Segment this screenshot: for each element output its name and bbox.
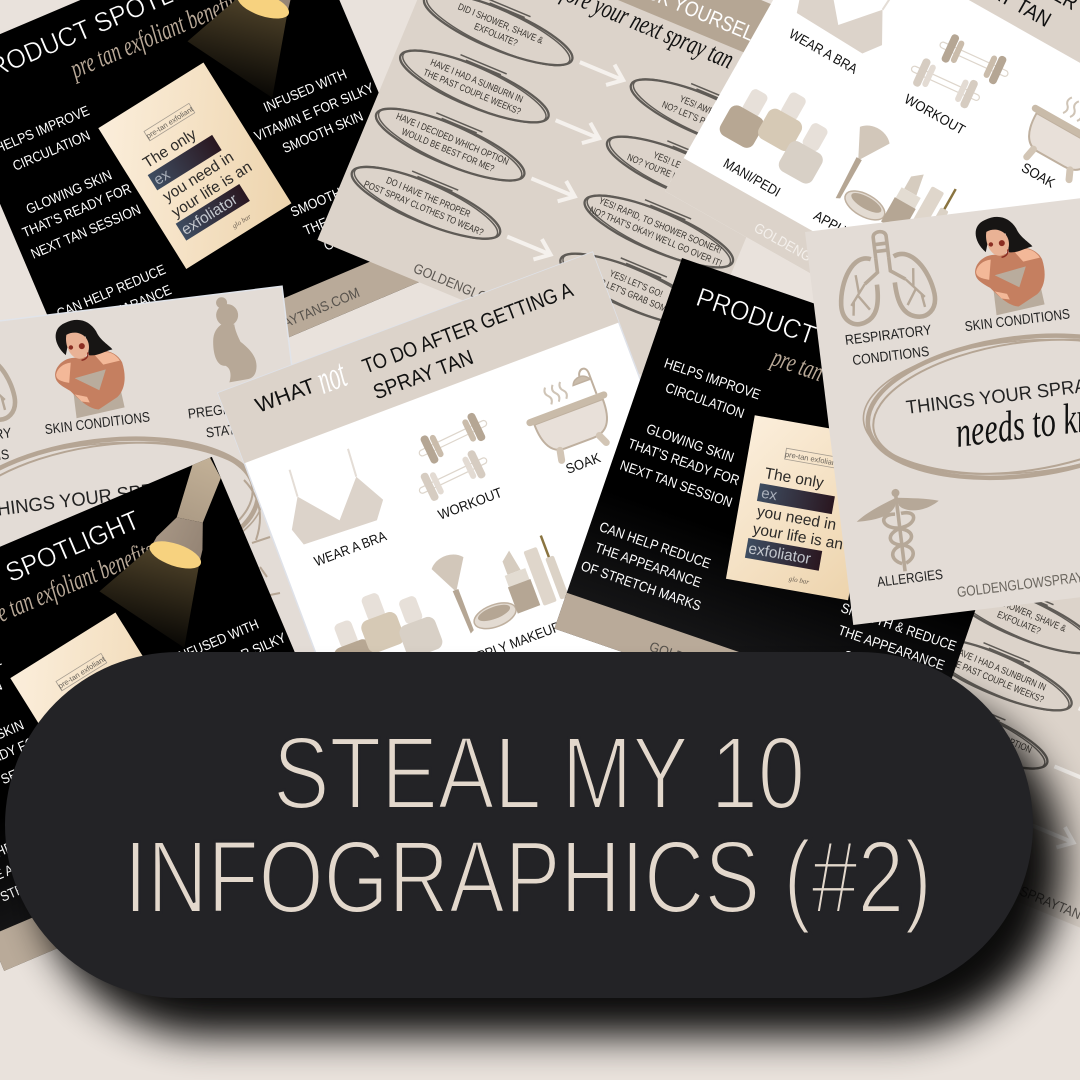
question ovals: [344, 0, 581, 253]
panel: questions to ask yourself card, top centre: [317, 0, 852, 400]
subheading script: pre tan exfoliant benefits: [766, 342, 951, 431]
question text: HAVE I DECIDED WHICH OPTION: [395, 110, 511, 167]
icon: pregnant silhouette: [207, 294, 258, 384]
product bag: [98, 62, 291, 269]
benefits left column: OF STRETCH MARKS: [579, 558, 703, 614]
question text: HAVE I HAD A SUNBURN IN: [952, 644, 1048, 693]
benefits left column: THAT'S READY FOR: [20, 180, 134, 241]
panel: product spotlight card, top left: [0, 0, 453, 421]
scribble tails beside lower-left card: [243, 480, 280, 595]
icon: bra: [272, 443, 389, 549]
label: WORKOUT: [436, 485, 504, 523]
arrows: [503, 52, 627, 265]
product bag: pre-tan exfoliant: [56, 654, 108, 691]
icon: bra: [790, 0, 912, 60]
website text: GOLDENGLOWSPRAYTANS.COM: [411, 260, 598, 350]
answer text: [564, 77, 776, 327]
question text: HAVE I HAD A SUNBURN IN: [429, 56, 525, 105]
question text: DO I HAVE THE PROPER: [385, 175, 472, 219]
question ovals: [867, 564, 1080, 841]
product bag: you need in: [756, 503, 837, 534]
product bag: ex: [151, 166, 174, 189]
benefits left column: NEXT TAN SESSION: [28, 201, 143, 262]
benefits right column: VITAMIN E FOR SILKY: [164, 629, 288, 694]
icon: lungs: [833, 226, 937, 326]
answer text: NO? LET'S GRAB SOME!: [588, 272, 675, 317]
icon: makeup: [429, 520, 570, 641]
heading band: [821, 0, 1080, 113]
answer text: YES! LET'S GO!: [608, 267, 664, 299]
benefits right column: OF CELLULITE: [321, 205, 407, 254]
label: [0, 425, 15, 472]
label: CONDITIONS: [851, 343, 930, 368]
benefits left column: CAN HELP REDUCE: [597, 519, 713, 572]
label: PREGNANCY: [187, 396, 266, 422]
label: APPLY MAKEUP: [811, 207, 903, 269]
icon: nail polish: [716, 69, 846, 186]
icon: dumbbells: [903, 18, 1016, 124]
heading: PRODUCT SPOTLIGHT: [693, 282, 960, 399]
answer text: YES! LET'S BOOK!: [652, 149, 717, 185]
benefits left column: OF STRETCH MARKS: [67, 299, 189, 363]
question text: DID I SHOWER, SHAVE &: [456, 1, 545, 46]
icon: bath: [1009, 79, 1080, 189]
footer band: [77, 233, 453, 421]
label: SKIN CONDITIONS: [44, 408, 151, 437]
question text: EXFOLIATE?: [996, 609, 1042, 636]
product bag: The only: [140, 126, 200, 172]
benefits left column: GLOWING SKIN: [24, 167, 114, 217]
title pill: [5, 652, 1033, 998]
product bag: you need in: [160, 149, 237, 205]
panel: things your spray tan artist needs to know, right: [805, 183, 1080, 625]
label: WEAR A BRA: [312, 528, 389, 569]
benefits right column: INFUSED WITH: [173, 616, 261, 665]
question text: [362, 0, 562, 238]
icon: makeup: [822, 120, 967, 252]
question text: HAVE I DECIDED WHICH OPTION: [918, 698, 1034, 755]
label: MANI/PEDI: [721, 155, 783, 200]
panel: product spotlight card, lower left: [0, 457, 365, 971]
benefits right column: VITAMIN E FOR SILKY: [252, 79, 376, 144]
website text: GOLDENGLOWSPRAYTANS.COM: [172, 284, 362, 377]
answer text: NO? YOU'RE IN GOOD HANDS!: [626, 151, 734, 205]
icon: dumbbells: [399, 408, 507, 506]
panel: product spotlight card, centre: [554, 258, 1053, 756]
benefits left column: CIRCULATION: [10, 127, 92, 174]
answer text: YES! RAPID, TO SHOWER SOONER!: [597, 195, 723, 256]
answer text: NO? LET'S PICK A DATE!: [660, 99, 747, 143]
panel: things your spray tan artist needs to know, left: [0, 286, 330, 728]
benefits right column: [155, 608, 297, 714]
product bag: glo bar: [788, 575, 810, 586]
arrows: [1026, 698, 1080, 853]
benefits left column: CAN HELP REDUCE: [54, 261, 168, 322]
benefits right column: [825, 600, 959, 696]
product bag: The only: [763, 465, 825, 492]
benefits right column: SMOOTH SKIN: [192, 658, 277, 706]
product bag: [726, 415, 877, 600]
panel: questions card, lower right: [840, 466, 1080, 980]
label: [844, 322, 935, 369]
icon: lungs: [0, 329, 17, 429]
question text: WOULD BE BEST FOR ME?: [400, 126, 496, 174]
heading continued: TO DO AFTER GETTING A: [359, 278, 576, 378]
scribble oval: [853, 316, 1080, 498]
benefits right column: SMOOTH SKIN: [280, 108, 365, 156]
benefits left column: CIRCULATION: [663, 379, 746, 421]
question text: WOULD BE BEST FOR ME?: [923, 714, 1019, 762]
icon: woman: [49, 315, 129, 420]
benefits right column: [243, 58, 426, 262]
product bag: exfoliator: [747, 540, 812, 568]
question text: DID I SHOWER, SHAVE &: [979, 589, 1068, 634]
label: STATUS: [205, 419, 253, 441]
benefits left column: [0, 647, 101, 913]
footer band: [0, 783, 365, 971]
product bag: ex: [760, 485, 779, 504]
footer band: [554, 593, 937, 756]
scribble oval: [0, 419, 273, 601]
answer text: YES! AWESOME!: [678, 93, 739, 127]
label: WEAR A BRA: [786, 26, 861, 77]
question text: [913, 583, 1080, 766]
product bag: pre-tan exfoliant: [144, 104, 196, 141]
label: [187, 396, 269, 443]
answer ovals: [551, 62, 790, 340]
benefits right column: THE APPEARANCE: [301, 180, 410, 238]
question text: THE PAST COUPLE WEEKS?: [945, 655, 1046, 705]
label: APPLY MAKEUP: [467, 618, 563, 667]
label: RESPIRATORY: [844, 322, 932, 348]
product bag: glo bar: [231, 212, 253, 230]
benefits left column: NEXT TAN SESSION: [618, 457, 734, 510]
heading second line: SPRAY TAN: [370, 346, 477, 404]
question text: THE PAST COUPLE WEEKS?: [422, 67, 523, 117]
benefits right column: INFUSED WITH: [261, 66, 349, 115]
benefits right column: THE APPEARANCE: [836, 622, 947, 673]
label: SOAK: [564, 450, 603, 477]
benefits left column: GLOWING SKIN: [644, 421, 736, 465]
icon: caduceus: [853, 484, 947, 576]
benefits left column: [579, 351, 775, 614]
benefits left column: THE APPEARANCE: [65, 282, 174, 340]
icon: nail polish: [318, 576, 445, 684]
label: SKIN CONDITIONS: [964, 305, 1071, 334]
pill shadow: [35, 690, 1063, 1036]
heading band: [218, 252, 619, 463]
spotlight lamp: [156, 0, 364, 120]
benefits left column: HELPS IMPROVE: [662, 355, 763, 403]
heading first word: WHAT: [252, 374, 319, 418]
title line 1: STEAL MY 10: [273, 716, 805, 830]
label: WORKOUT: [902, 91, 968, 138]
benefits left column: [0, 97, 189, 363]
website text: GOLDENGLOWSPRAYTANS.COM: [647, 638, 842, 718]
heading band: [447, 0, 833, 81]
product bag: pre-tan exfoliant: [784, 450, 840, 468]
answer text: NO? THAT'S OKAY! WE'LL GO OVER IT!: [588, 204, 723, 269]
footer band: [665, 158, 1032, 388]
product bag: exfoliator: [178, 191, 241, 239]
question text: POST SPRAY CLOTHES TO WEAR?: [362, 178, 485, 238]
label: SOAK: [1019, 160, 1058, 191]
product bag: [10, 612, 203, 819]
product bag: your life is an: [751, 521, 844, 553]
question text: EXFOLIATE?: [473, 21, 519, 48]
benefits right column: OF CELLULITE: [841, 647, 928, 690]
benefits left column: THE APPEARANCE: [593, 539, 704, 591]
icon: woman: [969, 212, 1049, 317]
spotlight lamp: [68, 457, 276, 670]
benefits right column: SMOOTH & REDUCE: [288, 158, 406, 220]
panel: what not to do card, top right: [665, 0, 1080, 388]
label: ALLERGIES: [876, 566, 944, 590]
script word: not: not: [311, 351, 353, 403]
panel: what not to do card, centre: [218, 252, 733, 767]
icon: bath: [515, 364, 623, 467]
website text: GOLDENGLOWSPRAYTANS.COM: [751, 219, 933, 332]
benefits left column: THAT'S READY FOR: [626, 435, 742, 488]
product bag: your life is an: [169, 158, 255, 221]
benefits right column: SMOOTH & REDUCE: [839, 600, 959, 654]
